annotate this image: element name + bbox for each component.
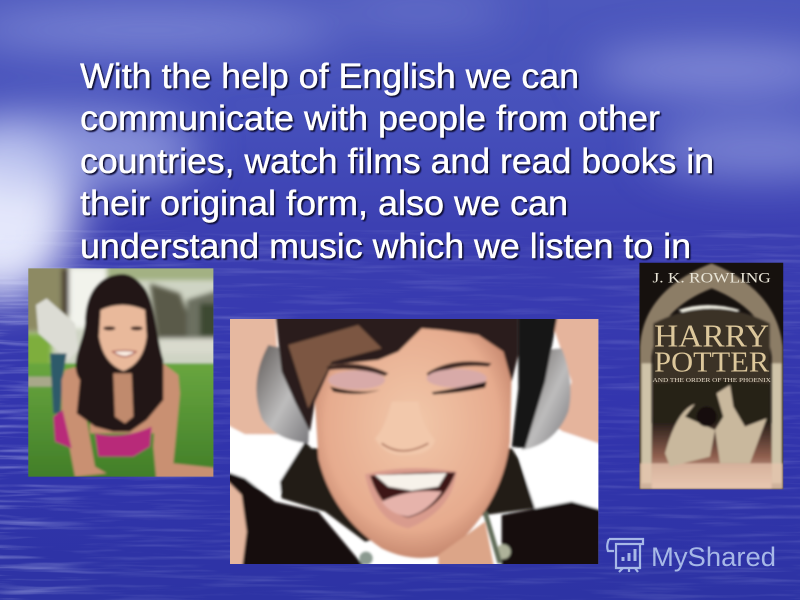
subtitle: AND THE ORDER OF THE PHOENIX [652,377,771,384]
main text: understand music which we listen to in [80,227,691,266]
chest [90,373,160,433]
logo wordmark: MyShared [651,542,776,572]
fan vault [653,308,770,417]
main text: With the help of English we can [80,57,579,96]
skylight [678,305,740,317]
hair [76,274,163,432]
lashes [330,387,380,394]
main text: their original form, also we can [80,184,568,223]
smile [113,350,136,357]
eye shadow [328,371,385,389]
title line 1: HARRY [654,318,769,354]
eyebrows [327,364,388,376]
headband [512,312,558,448]
headphone cups [256,345,312,443]
book cover: Harry Potter [639,263,783,489]
photo: girl lying on grass [20,260,227,483]
logo: MyShared [607,539,776,572]
hair front [275,312,518,432]
neck [438,522,495,572]
nose [375,402,435,455]
top [53,410,152,457]
main text [80,57,714,266]
face [99,305,147,371]
mouth [365,468,457,528]
stone arch [640,263,783,489]
author: J. K. ROWLING [652,270,771,286]
main text: communicate with people from other [80,99,660,138]
arms and shoulders [62,365,107,477]
main text: countries, watch films and read books in [80,142,714,181]
raised feet [36,298,78,360]
hair back [280,442,535,542]
hands [222,312,282,434]
flames [652,423,772,489]
title line 2: POTTER [654,347,770,379]
jeans [50,353,67,413]
necklace [359,552,373,565]
photo: laughing woman with headphones [222,312,608,572]
eyes [103,326,115,330]
face [313,315,512,558]
upper chest between hair [113,373,133,423]
icon: presentation board [607,539,643,572]
phoenix [665,385,767,467]
shirt [222,470,368,572]
white backdrop [222,428,608,512]
